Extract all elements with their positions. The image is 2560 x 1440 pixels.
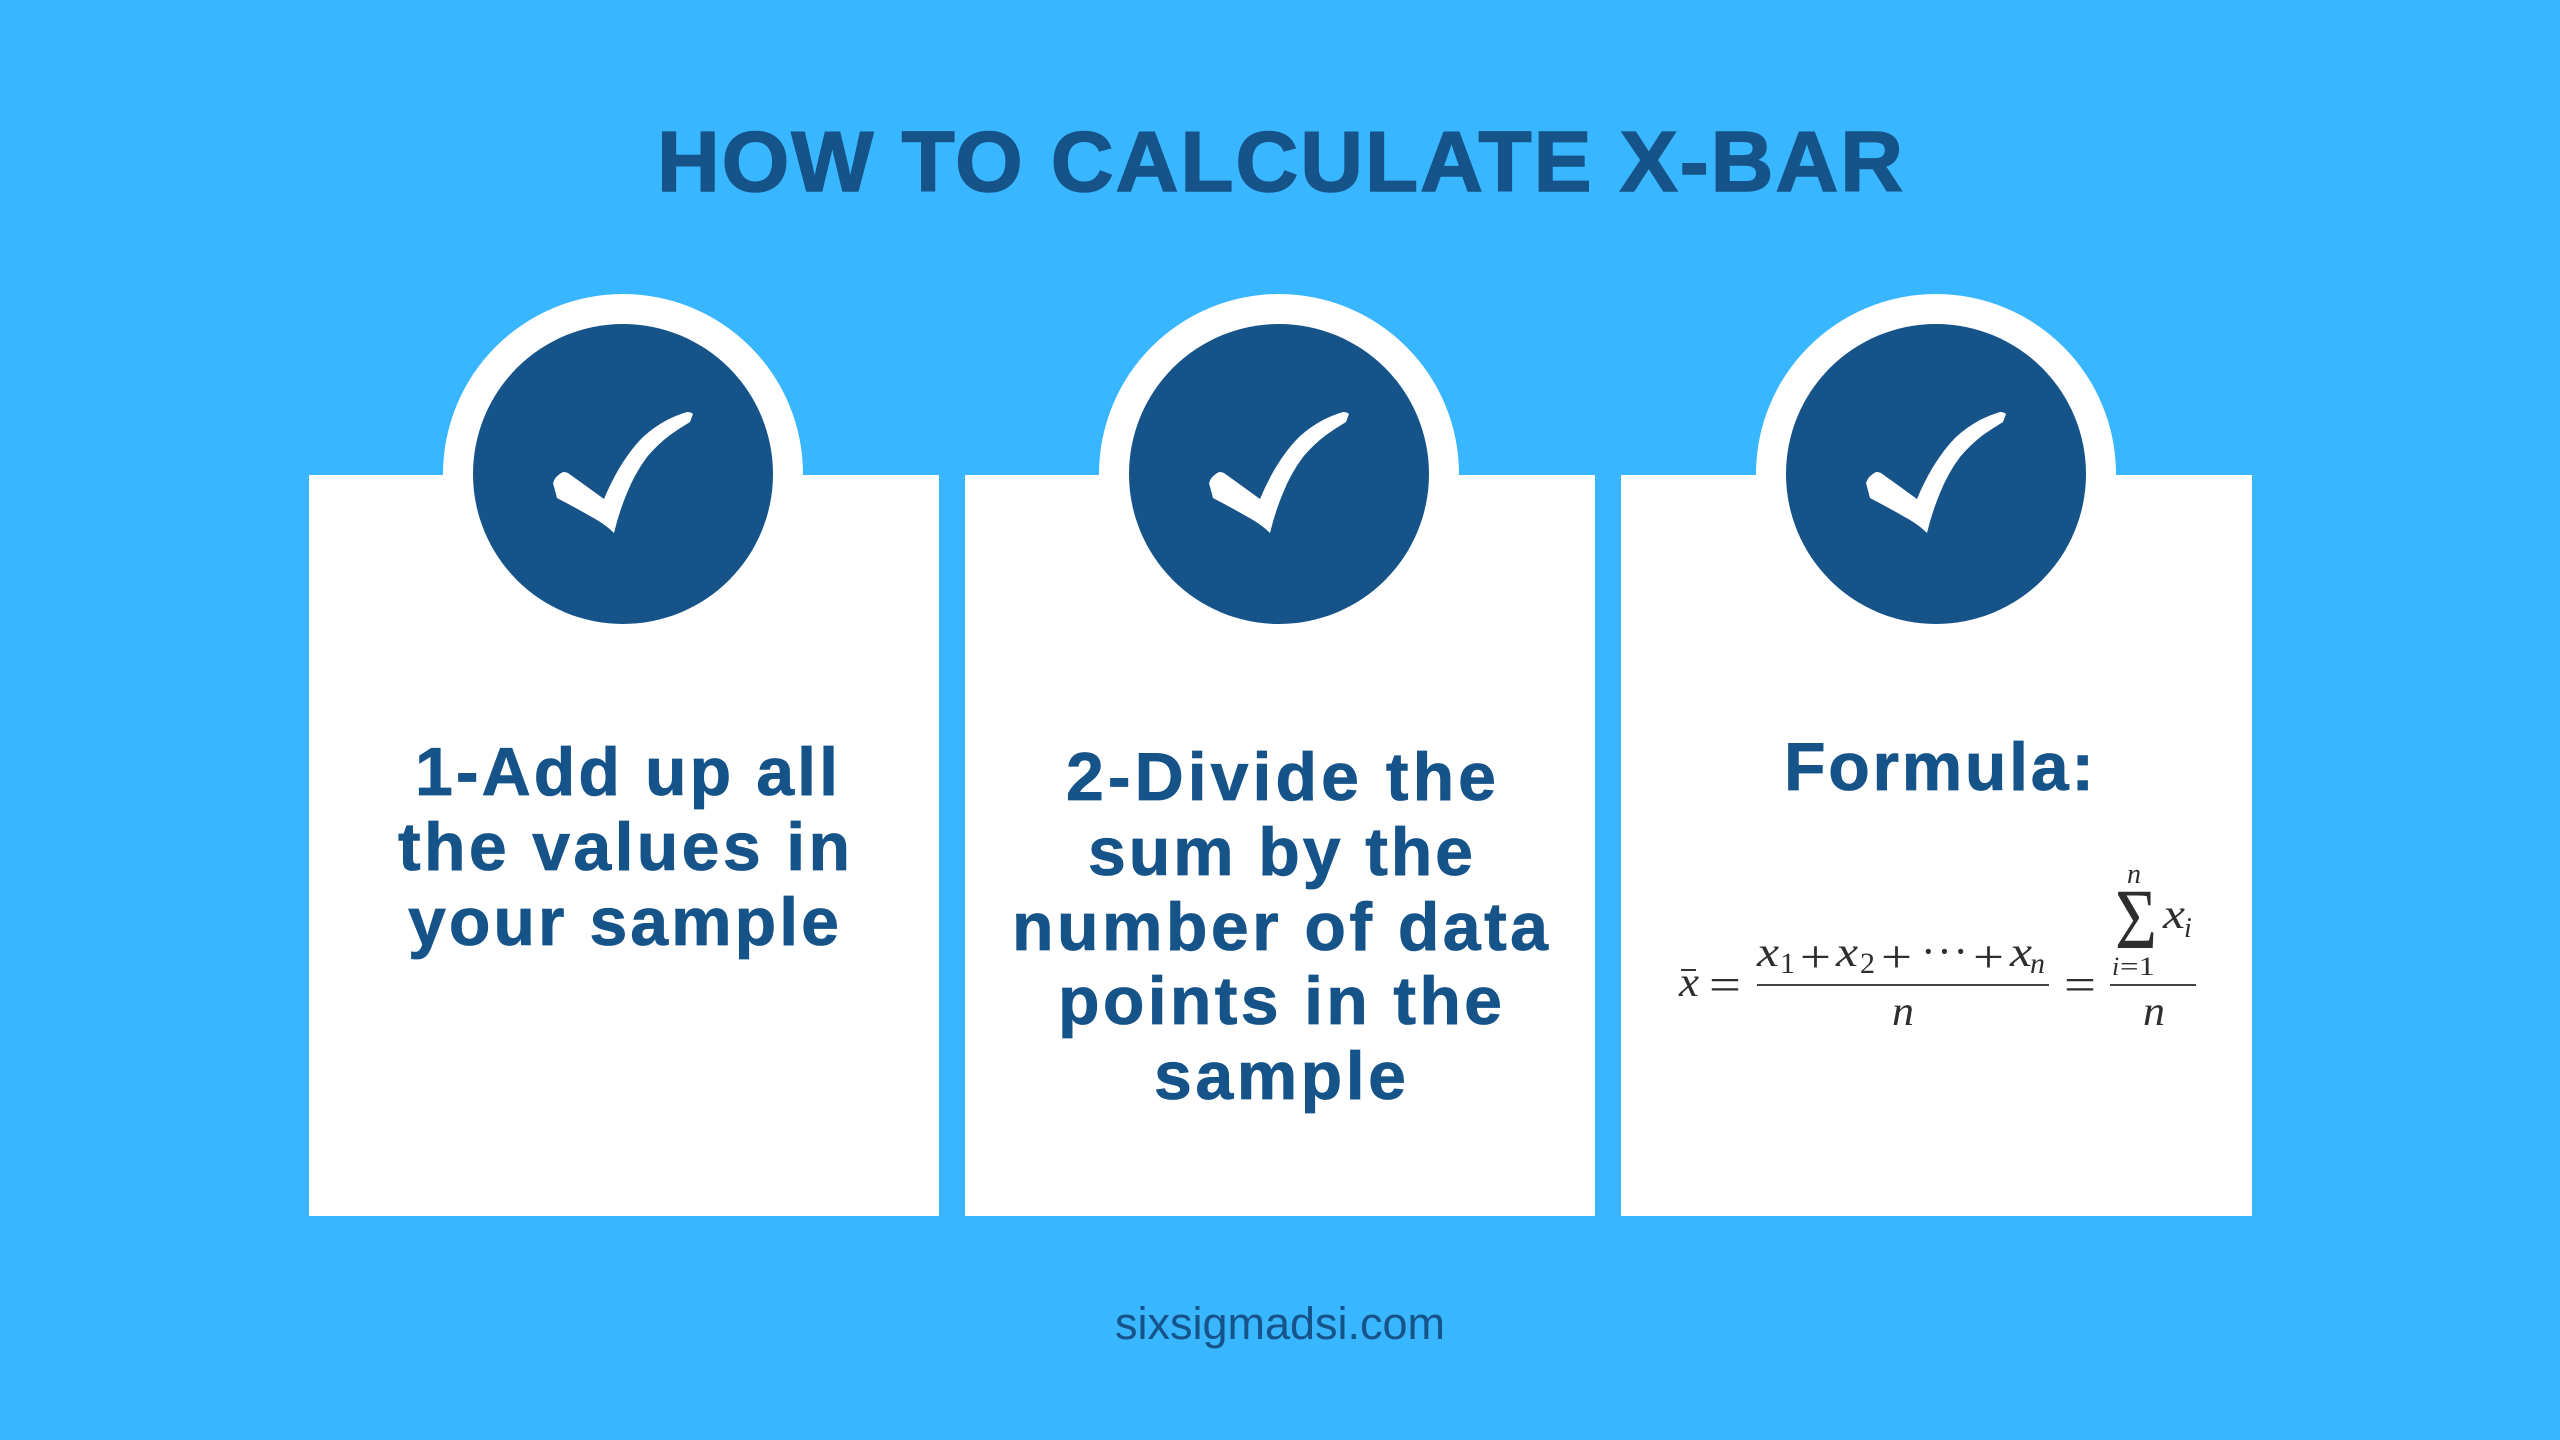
heading: formula: Formula: [1784,729,2094,805]
text: step 2 instructions: sample [1154,1038,1406,1114]
panel: step 1 [309,294,939,1216]
formula: x-bar equation: =1 [2120,952,2155,981]
formula: x-bar equation: n [2030,947,2045,980]
formula: x-bar equation [1678,859,2196,1035]
text: step 1 instructions: your sample [408,884,839,960]
formula: x-bar equation: x [2009,930,2032,976]
text: step 2 instructions: points in the [1058,963,1502,1039]
formula: x-bar equation: x [1835,930,1858,976]
icon: check badge step 1 [473,324,773,624]
text: step 2 instructions: 2-Divide the [1066,739,1496,815]
formula: x-bar equation: = [2064,959,2096,1010]
formula: x-bar equation: n [2143,989,2165,1035]
formula: x-bar equation: Σ [2115,871,2157,967]
text: step 1 instructions: 1-Add up all [415,734,838,810]
formula: x-bar equation: ··· [1921,927,1968,976]
text: step 1 instructions: the values in [398,809,850,885]
formula: x-bar equation: + [1800,931,1831,982]
formula: x-bar equation: x [1678,960,1699,1006]
icon: check badge formula [1786,324,2086,624]
formula: x-bar equation: + [1881,931,1912,982]
formula: x-bar equation: 2 [1860,947,1875,980]
formula: x-bar equation: i [2112,952,2119,981]
footer: website: sixsigmadsi.com [1115,1298,1445,1349]
panel: step 2 [965,294,1595,1216]
formula: x-bar equation: i [2184,913,2192,944]
icon: check badge step 2 [1129,324,1429,624]
formula: x-bar equation: x [1756,930,1779,976]
formula: x-bar equation: n [2127,859,2141,890]
formula: x-bar equation: n [1892,989,1914,1035]
formula: x-bar equation: 1 [1780,947,1795,980]
text: step 2 instructions [1012,739,1549,1114]
formula: x-bar equation: x [2162,892,2185,938]
panel: formula [1621,294,2252,1216]
formula: x-bar equation: + [1973,931,2004,982]
text: step 1 instructions [398,734,850,960]
text: step 2 instructions: sum by the [1088,814,1473,890]
text: step 2 instructions: number of data [1012,889,1549,965]
formula: x-bar equation: = [1709,959,1741,1010]
title: HOW TO CALCULATE X-BAR [657,115,1905,210]
